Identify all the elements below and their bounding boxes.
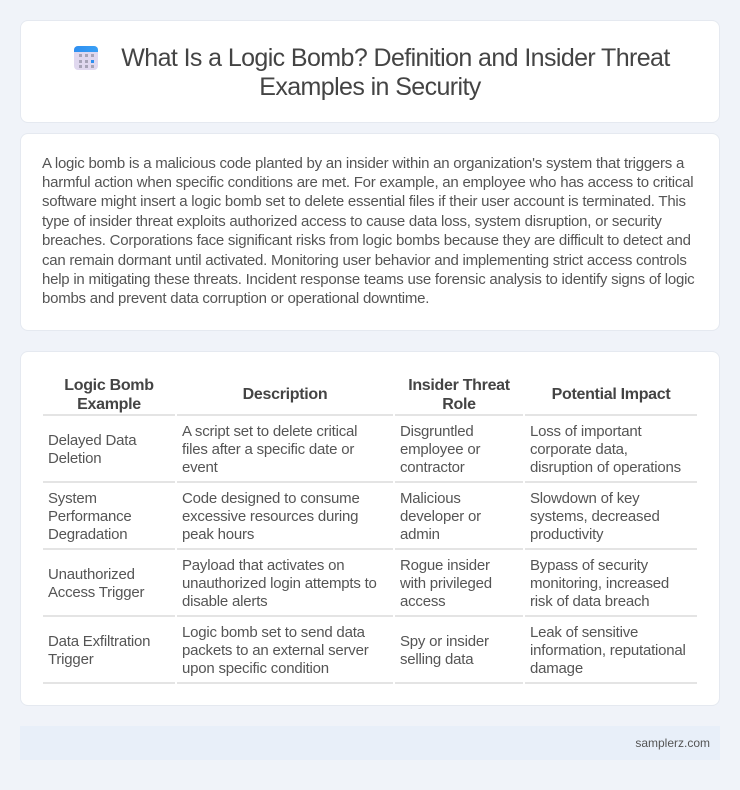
row: data exfiltration trigger: Trigger <box>48 651 94 668</box>
text block: logic bomb definition: type of insider threat exploits authorized access to cause data loss, system disruption, or security <box>42 213 662 230</box>
row: data exfiltration trigger: Spy or insider <box>400 633 489 650</box>
text block: logic bomb definition: harmful action when specific conditions are met. For example, an employee who has access to critical <box>42 174 693 191</box>
row: delayed data deletion: A script set to delete critical <box>182 423 357 440</box>
text block: logic bomb definition: breaches. Corporations face significant risks from logic bombs because they are difficult to detect and <box>42 232 691 249</box>
title <box>121 44 670 101</box>
title: Examples in Security <box>259 73 481 101</box>
row: data exfiltration trigger: Logic bomb set to send data <box>182 624 365 641</box>
row: system performance degradation: developer or <box>400 508 481 525</box>
row: delayed data deletion: contractor <box>400 459 465 476</box>
row: system performance degradation: Performance <box>48 508 132 525</box>
row: unauthorized access trigger: unauthorized login attempts to <box>182 575 377 592</box>
row: delayed data deletion: disruption of operations <box>530 459 681 476</box>
panel: header <box>20 20 720 123</box>
row: system performance degradation: productivity <box>530 526 603 543</box>
row: data exfiltration trigger: information, reputational <box>530 642 686 659</box>
column heading: description: Description <box>243 386 327 403</box>
row: system performance degradation: admin <box>400 526 440 543</box>
row: data exfiltration trigger: packets to an external server <box>182 642 369 659</box>
row: unauthorized access trigger: Unauthorized <box>48 566 135 583</box>
row: unauthorized access trigger: access <box>400 593 445 610</box>
row: system performance degradation: Slowdown of key <box>530 490 639 507</box>
row: data exfiltration trigger: upon specific condition <box>182 660 329 677</box>
panel: table <box>20 351 720 706</box>
row: delayed data deletion: event <box>182 459 218 476</box>
row: delayed data deletion: Delayed Data <box>48 432 136 449</box>
column heading: logic bomb example: Example <box>77 396 141 413</box>
column heading: insider threat role <box>408 377 510 413</box>
row: delayed data deletion: files after a specific date or <box>182 441 354 458</box>
row: delayed data deletion: Disgruntled <box>400 423 474 440</box>
text block: logic bomb definition: can remain dormant until activated. Monitoring user behavior and implementing strict access controls <box>42 252 687 269</box>
icon: calendar <box>74 46 98 70</box>
row: delayed data deletion: Deletion <box>48 450 101 467</box>
row: data exfiltration trigger: Leak of sensitive <box>530 624 638 641</box>
row: data exfiltration trigger: damage <box>530 660 583 677</box>
row: system performance degradation: excessive resources during <box>182 508 358 525</box>
row: delayed data deletion <box>48 423 681 476</box>
row: delayed data deletion: employee or <box>400 441 480 458</box>
row: system performance degradation: systems, decreased <box>530 508 660 525</box>
row: system performance degradation: peak hours <box>182 526 254 543</box>
text block: logic bomb definition: A logic bomb is a malicious code planted by an insider within an organization's system that triggers a <box>42 154 684 172</box>
row: unauthorized access trigger: with privileged <box>400 575 492 592</box>
row: unauthorized access trigger: Access Trigger <box>48 584 144 601</box>
column heading: insider threat role: Role <box>442 396 476 413</box>
row: system performance degradation: Malicious <box>400 490 461 507</box>
table header <box>64 377 670 413</box>
column heading: potential impact: Potential Impact <box>552 386 670 403</box>
column heading: logic bomb example: Logic Bomb <box>64 377 154 394</box>
row: unauthorized access trigger: risk of data breach <box>530 593 649 610</box>
row: system performance degradation <box>48 490 660 543</box>
row: system performance degradation: System <box>48 490 97 507</box>
row: delayed data deletion: Loss of important <box>530 423 642 440</box>
row: data exfiltration trigger: Data Exfiltration <box>48 633 150 650</box>
row: data exfiltration trigger <box>48 624 686 677</box>
row: unauthorized access trigger: monitoring, increased <box>530 575 669 592</box>
text block: logic bomb definition: bombs and prevent data corruption or operational downtime. <box>42 290 429 307</box>
row: delayed data deletion: corporate data, <box>530 441 628 458</box>
text block: logic bomb definition <box>42 154 694 307</box>
text block: logic bomb definition: help in mitigating these threats. Incident response teams use forensic analysis to identify signs of logic <box>42 271 694 288</box>
footer text: samplerz.com: samplerz.com <box>635 736 710 750</box>
row: unauthorized access trigger: disable alerts <box>182 593 267 610</box>
row: unauthorized access trigger <box>48 557 669 610</box>
column heading: logic bomb example <box>64 377 154 413</box>
row: unauthorized access trigger: Payload that activates on <box>182 557 344 574</box>
row: unauthorized access trigger: Bypass of security <box>530 557 648 574</box>
text block: logic bomb definition: software might insert a logic bomb set to delete essential files if their user account is terminated. This <box>42 193 686 210</box>
row: data exfiltration trigger: selling data <box>400 651 473 668</box>
footer <box>20 726 720 760</box>
row: unauthorized access trigger: Rogue insider <box>400 557 490 574</box>
row: system performance degradation: Code designed to consume <box>182 490 360 507</box>
panel: intro text <box>20 133 720 331</box>
row: system performance degradation: Degradation <box>48 526 127 543</box>
title: What Is a Logic Bomb? Definition and Insider Threat <box>121 44 670 72</box>
column heading: insider threat role: Insider Threat <box>408 377 510 394</box>
